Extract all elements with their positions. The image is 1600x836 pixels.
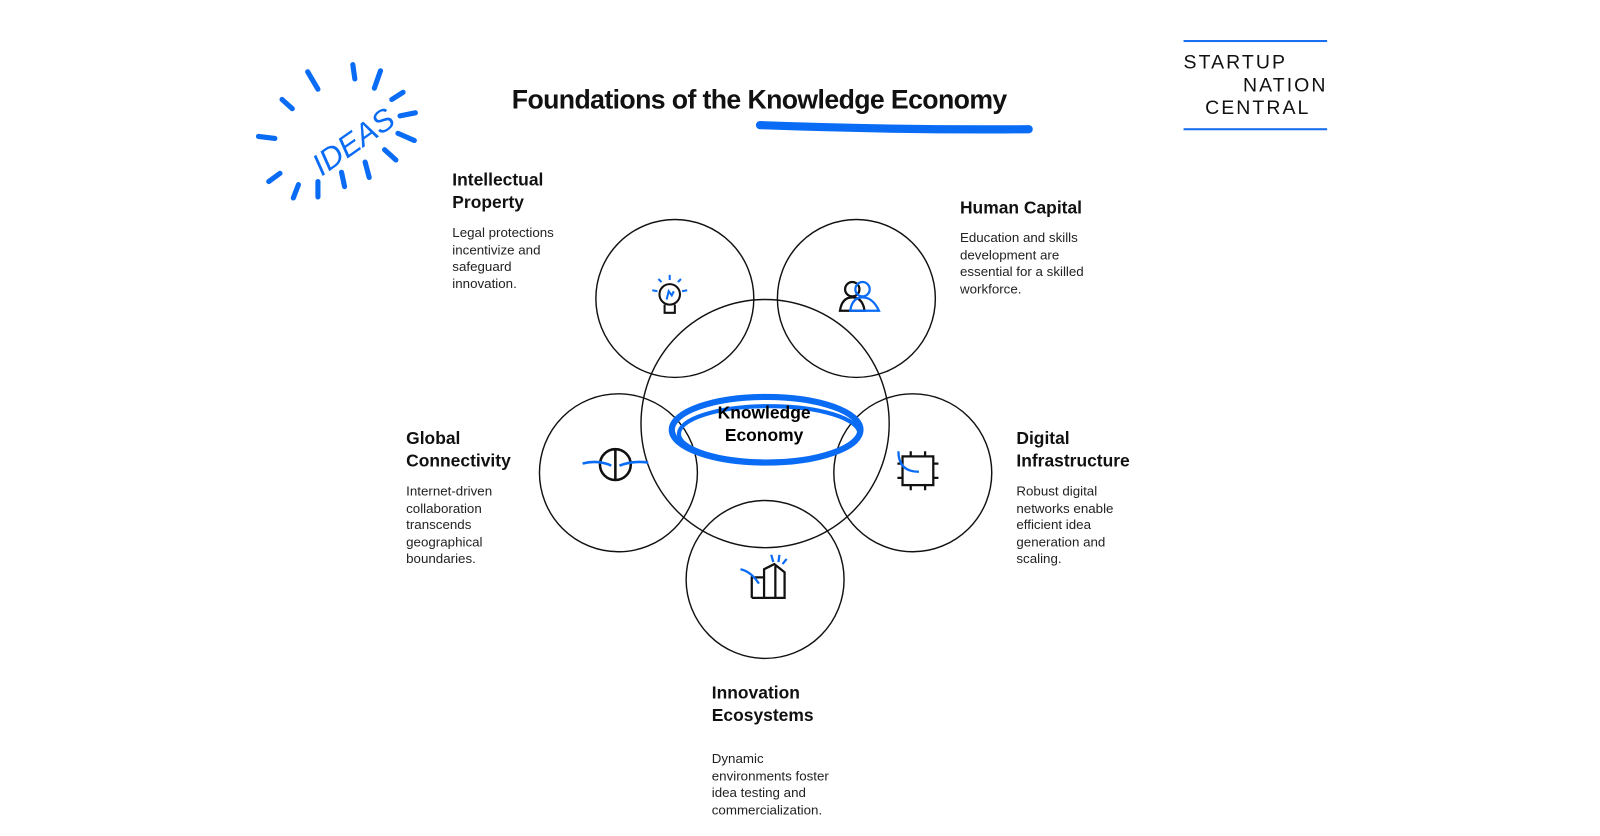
text: global connectivity [406,429,511,566]
icon: buildings [740,555,787,598]
title [512,84,1033,134]
logo: STARTUP [1184,52,1287,74]
logo [1184,40,1327,130]
text: intellectual property: Intellectual Property [452,170,543,212]
logo: NATION [1243,75,1328,96]
icon: lightbulb [652,275,687,313]
text: innovation ecosystems: Dynamic environments foster idea testing and commercialization. [712,751,829,817]
text: innovation ecosystems [712,683,829,817]
text: intellectual property [452,170,554,291]
ideas text: IDEAS [306,101,402,182]
text: human capital: Human Capital [960,198,1082,217]
title underline [756,121,1033,134]
ideas doodle [256,62,418,200]
icon: people [840,282,879,311]
text: innovation ecosystems: Innovation Ecosystems [712,683,814,725]
diagram circles: Economy [725,425,804,445]
text: digital infrastructure: Robust digital networks enable efficient idea generation and scaling. [1016,483,1113,566]
center ellipse highlight [672,397,860,463]
title: Foundations of the Knowledge Economy [512,84,1007,115]
text: global connectivity: Internet-driven collaboration transcends geographical boundaries. [406,483,492,566]
icon: globe [583,449,648,480]
text: human capital: Education and skills development are essential for a skilled workforce. [960,230,1084,296]
logo: CENTRAL [1205,97,1310,119]
icon: chip [897,451,938,490]
text: human capital [960,198,1084,296]
text: digital infrastructure [1016,429,1130,566]
text: digital infrastructure: Digital Infrastructure [1016,429,1130,471]
center label: Knowledge [718,402,811,422]
text: global connectivity: Global Connectivity [406,429,511,471]
text: intellectual property: Legal protections incentivize and safeguard innovation. [452,225,554,291]
